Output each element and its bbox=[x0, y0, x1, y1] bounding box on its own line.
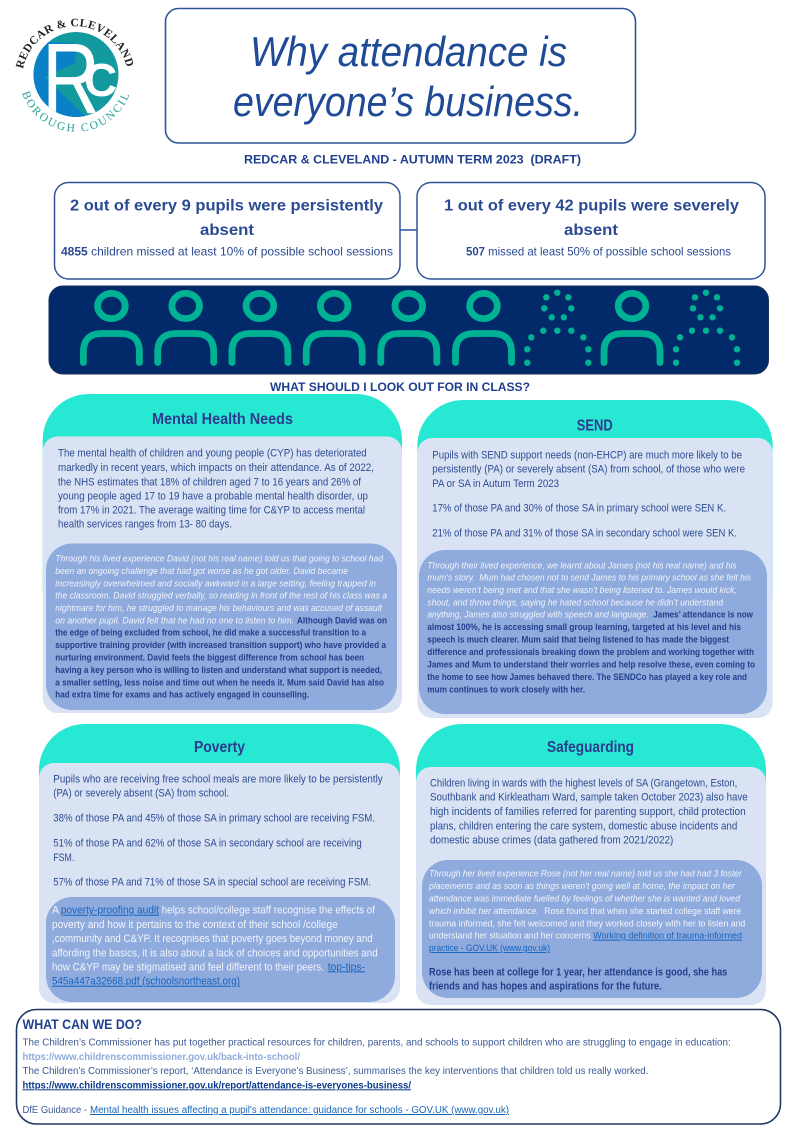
icon: pupil absent 2 bbox=[673, 290, 740, 366]
text: mental health statistics: young people aged 17 to 19 have a probable mental health disorder, up bbox=[58, 490, 368, 502]
text: children's commissioner resources: The Children’s Commissioner has put together practical resources for children, parents, and schools to support children who are struggling to engage in education: bbox=[22, 1038, 731, 1049]
text: children's commissioner resources: https://www.childrenscommissioner.gov.uk/report/attendance-is-everyones-business/ bbox=[22, 1080, 411, 1091]
callout: David's story: supportive training provider (with increased transition support) who have provided a bbox=[55, 639, 387, 650]
callout: poverty-proofing audit bbox=[46, 897, 395, 1002]
callout: Rose's story: understand her situation and her concerns bbox=[429, 930, 591, 941]
callout: James's story: almost 100%, he is accessing small group learning, targeted at his level and his bbox=[427, 621, 741, 632]
callout: James's story: the home to see how James behaved there. The SENDCo has played a key role and bbox=[427, 671, 747, 682]
heading: safeguarding: Safeguarding bbox=[547, 739, 634, 756]
callout: poverty-proofing audit: A bbox=[52, 905, 60, 917]
logo: Redcar & Cleveland Borough Council: BOROUGH COUNCIL bbox=[22, 90, 130, 132]
heading: what can we do: WHAT CAN WE DO? bbox=[22, 1017, 142, 1032]
title: Why attendance is bbox=[250, 28, 567, 75]
callout: James's story: difference and professionals breaking down the problem and working together with bbox=[427, 646, 754, 657]
callout: Rose's story: trauma informed, she felt welcomed and they worked closely with her to listen and bbox=[429, 917, 745, 928]
text: safeguarding statistics: plans, children entering the care system, domestic abuse incidents and bbox=[430, 820, 737, 832]
heading: poverty: Poverty bbox=[194, 739, 245, 756]
text: SEND statistics: Pupils with SEND support needs (non-EHCP) are much more likely to be bbox=[432, 449, 742, 461]
logo: Redcar & Cleveland Borough Council: R bbox=[42, 23, 100, 135]
text: SEND statistics: 17% of those PA and 30% of those SA in primary school were SEN K. bbox=[432, 503, 726, 515]
panel: persistently absent stat: absent bbox=[200, 222, 254, 239]
text: SEND statistics bbox=[432, 449, 745, 540]
panel: severely absent stat bbox=[417, 182, 765, 279]
icon: pupil present 5 bbox=[381, 293, 437, 362]
panel: mental health needs bbox=[43, 394, 402, 713]
callout: Rose's story: Through her lived experience Rose (not her real name) told us she had had 3 foster bbox=[429, 868, 742, 879]
text: safeguarding statistics: Southbank and Kirkleatham Ward, sample taken October 2023) also have bbox=[430, 792, 748, 804]
callout: James's story: James and Mum to understand their worries and help resolve these, even coming to bbox=[427, 658, 755, 669]
callout: James's story: mum’s story. Mum had chosen not to send James to his primary school as she felt his bbox=[427, 572, 751, 583]
callout: David's story: had extra time for exams and has actively engaged in counselling. bbox=[55, 689, 309, 700]
text: DfE guidance: DfE Guidance - bbox=[22, 1105, 87, 1116]
text: safeguarding statistics: high incidents of families referred for parenting support, child protection bbox=[430, 806, 746, 818]
text: children's commissioner resources: The Children’s Commissioner’s report, ‘Attendance is Everyone’s Business’, summarises the key interventions that children told us really worked. bbox=[22, 1066, 648, 1077]
callout: James's story: James’ attendance is now bbox=[653, 609, 754, 620]
panel: what can we do bbox=[16, 1010, 780, 1124]
callout: James's story bbox=[419, 550, 767, 714]
callout: poverty-proofing audit: affording the basics, it is also about a lack of choices and opportunities and bbox=[52, 947, 378, 959]
text: mental health statistics: the NHS estimates that 18% of children aged 7 to 16 years and 26% of bbox=[58, 476, 361, 488]
panel: poverty bbox=[39, 724, 400, 1003]
title box bbox=[166, 8, 636, 143]
text: mental health statistics bbox=[58, 448, 374, 531]
callout: David's story: the edge of being excluded from school, he did make a successful transition to a bbox=[55, 627, 367, 638]
pictogram band: 2 in 9 pupils bbox=[49, 286, 768, 374]
panel: persistently absent stat: 2 out of every 9 pupils were persistently bbox=[70, 198, 383, 214]
panel: severely absent stat: 507 missed at least 50% of possible school sessions bbox=[466, 244, 731, 258]
text: children's commissioner resources bbox=[22, 1038, 731, 1091]
text: children's commissioner resources: https://www.childrenscommissioner.gov.uk/back-into-school/ bbox=[22, 1052, 300, 1063]
text: poverty statistics: 38% of those PA and 45% of those SA in primary school are receiving FSM. bbox=[53, 813, 375, 825]
callout: poverty-proofing audit: how C&YP may be stigmatised and feel different to their peers. bbox=[52, 961, 324, 973]
callout: Rose's story: Rose found that when she started college staff were bbox=[544, 905, 741, 916]
text: safeguarding statistics: Children living in wards with the highest levels of SA (Grangetown, Eston, bbox=[430, 777, 737, 789]
text: SEND statistics: PA or SA in Autum Term 2023 bbox=[432, 478, 559, 490]
callout: David's story: the classroom. David struggled verbally, so reading in front of the rest of his class was a bbox=[55, 590, 387, 601]
callout: David's story bbox=[46, 544, 397, 710]
text: mental health statistics: The mental health of children and young people (CYP) has deteriorated bbox=[58, 448, 367, 460]
text: SEND statistics: 21% of those PA and 31% of those SA in secondary school were SEN K. bbox=[432, 528, 737, 540]
section heading: WHAT SHOULD I LOOK OUT FOR IN CLASS? bbox=[270, 380, 530, 394]
icon: pupil present 7 bbox=[604, 293, 660, 362]
panel: persistently absent stat bbox=[54, 182, 400, 279]
callout: Rose's story: Working definition of trauma-informed bbox=[593, 930, 742, 941]
icon: pupil present 6 bbox=[456, 293, 512, 362]
heading: mental health needs: Mental Health Needs bbox=[152, 411, 293, 428]
text: mental health statistics: from 17% in 2021. The average waiting time for C&YP to access mental bbox=[58, 505, 365, 517]
callout: David's story: Through his lived experience David (not his real name) told us that going to school had bbox=[55, 553, 384, 564]
logo: Redcar & Cleveland Borough Council bbox=[16, 18, 133, 132]
panel: severely absent stat: 1 out of every 42 pupils were severely bbox=[444, 198, 739, 214]
callout: David's story: Although David was on bbox=[297, 614, 387, 625]
logo: Redcar & Cleveland Borough Council: C bbox=[84, 54, 117, 106]
text: DfE guidance: Mental health issues affecting a pupil's attendance: guidance for schools - GOV.UK (www.gov.uk) bbox=[90, 1105, 509, 1116]
callout: David's story: having a key person who is willing to listen and understand what support is needed, bbox=[55, 664, 382, 675]
callout: Rose's story: friends and has hopes and aspirations for the future. bbox=[429, 980, 662, 992]
subtitle: REDCAR & CLEVELAND - AUTUMN TERM 2023 (DRAFT) bbox=[244, 152, 581, 166]
text: mental health statistics: markedly in recent years, which impacts on their attendance. As of 2022, bbox=[58, 462, 374, 474]
callout: poverty-proofing audit: top-tips- bbox=[328, 961, 365, 973]
callout: poverty-proofing audit: 545a447a32668.pdf (schoolsnortheast.org) bbox=[52, 976, 240, 988]
connector between stat boxes bbox=[400, 229, 417, 231]
callout: poverty-proofing audit: ,community and C&YP. It recognises that poverty goes beyond money and bbox=[52, 933, 373, 945]
panel: SEND bbox=[417, 400, 773, 718]
icon: pupil absent 1 bbox=[524, 290, 592, 366]
icon: pupil present 3 bbox=[232, 293, 288, 362]
callout: James's story: anything, James also struggled with speech and language. bbox=[427, 609, 649, 620]
callout: Rose's story bbox=[422, 860, 762, 998]
callout: David's story: nurturing environment. David feels the biggest difference from school has been bbox=[55, 651, 364, 662]
callout: poverty-proofing audit: poverty and how it pertains to the context of their school /college bbox=[52, 919, 338, 931]
callout: poverty-proofing audit: poverty-proofing audit bbox=[61, 905, 159, 917]
title: everyone’s business. bbox=[233, 78, 583, 125]
text: poverty statistics: 51% of those PA and 62% of those SA in secondary school are receiving bbox=[53, 838, 362, 850]
callout: David's story: nightmare for him, he struggled to manage his behaviours and was accused of assault bbox=[55, 602, 382, 613]
text: safeguarding statistics bbox=[430, 777, 748, 846]
text: SEND statistics: persistently (PA) or severely absent (SA) from school, of those who were bbox=[432, 464, 745, 476]
panel: severely absent stat: absent bbox=[564, 222, 618, 239]
title bbox=[233, 28, 583, 125]
callout: poverty-proofing audit: helps school/college staff recognise the effects of bbox=[162, 905, 375, 917]
icon: pupil present 2 bbox=[158, 293, 214, 362]
callout: Rose's story: which inhibit her attendance. bbox=[429, 905, 539, 916]
callout: Rose's story: placements and as soon as things weren’t going well at home, the impact on her bbox=[428, 880, 736, 891]
callout: David's story: increasingly overwhelmed and socially awkward in a large setting, feeling trapped in bbox=[55, 577, 376, 588]
callout: James's story: speech is much clearer. Mum said that being listened to has made the biggest bbox=[427, 633, 729, 644]
callout: Rose's story: practice - GOV.UK (www.gov.uk) bbox=[429, 942, 550, 953]
callout: James's story: mum continues to work closely with her. bbox=[427, 683, 585, 694]
heading: SEND: SEND bbox=[577, 418, 613, 434]
text: poverty statistics: Pupils who are receiving free school meals are more likely to be persistently bbox=[53, 773, 383, 785]
callout: David's story: a smaller setting, less noise and time out when he needs it. Mum said David has also bbox=[55, 676, 384, 687]
callout: Rose's story: Rose has been at college for 1 year, her attendance is good, she has bbox=[429, 966, 727, 978]
callout: James's story: Through their lived experience, we learnt about James (not his real name) and his bbox=[427, 559, 737, 570]
text: poverty statistics: FSM. bbox=[53, 852, 74, 864]
text: safeguarding statistics: domestic abuse crimes (data gathered from 2021/2022) bbox=[430, 834, 673, 846]
logo: Redcar & Cleveland Borough Council: REDCAR & CLEVELAND bbox=[16, 18, 133, 69]
callout: David's story: been an ongoing challenge that had got worse as he got older. David became bbox=[55, 565, 348, 576]
panel: persistently absent stat: 4855 children missed at least 10% of possible school sessions bbox=[61, 244, 393, 258]
callout: James's story: shout, and throw things, saying he hated school because he didn’t understand bbox=[427, 596, 724, 607]
text: poverty statistics bbox=[53, 773, 383, 889]
callout: Rose's story: attendance was immediate fuelled by feelings of whether she is wanted and loved bbox=[429, 893, 741, 904]
text: poverty statistics: 57% of those PA and 71% of those SA in special school are receiving FSM. bbox=[53, 877, 371, 889]
text: poverty statistics: (PA) or severely absent (SA) from school. bbox=[53, 788, 229, 800]
callout: James's story: needs weren’t being met and that she wasn’t being listened to. James would kick, bbox=[427, 584, 737, 595]
text: mental health statistics: health services ranges from 13- 80 days. bbox=[58, 519, 232, 531]
icon: pupil present 4 bbox=[306, 293, 362, 362]
icon: pupil present 1 bbox=[83, 293, 139, 362]
callout: David's story: on another pupil. David felt that he had no one to listen to him. bbox=[55, 614, 294, 625]
panel: safeguarding bbox=[416, 724, 766, 1005]
